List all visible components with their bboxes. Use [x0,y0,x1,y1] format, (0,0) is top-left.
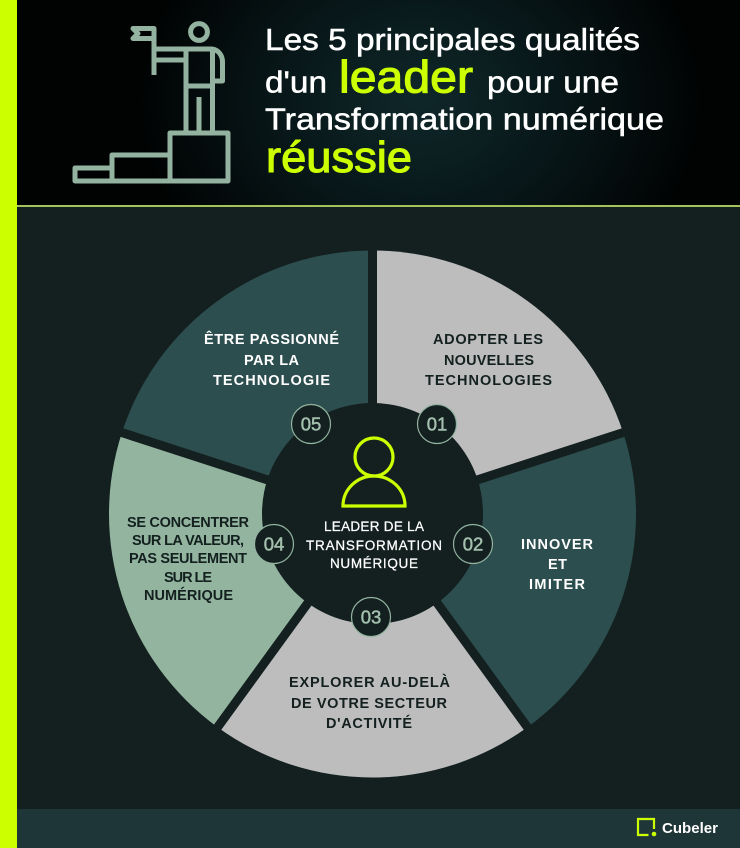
label 01 [425,332,552,389]
label 02: IMITER [529,577,586,593]
label 03: DE VOTRE SECTEUR [291,696,448,712]
badge 01 [418,404,456,444]
label 04: NUMÉRIQUE [144,587,233,604]
centre disc [262,403,483,624]
wheel of five qualities [109,245,636,778]
label 05 [204,330,339,389]
label 01: ADOPTER LES [433,332,543,348]
badge 02 [454,524,492,564]
badge 04 [254,524,294,564]
badge 04: 04 [264,534,284,554]
badge 02: 02 [463,534,483,554]
title: Les 5 principales qualités [265,22,640,57]
title: pour une [487,64,619,100]
label 04: PAS SEULEMENT [129,551,247,567]
segment 01 [372,250,623,514]
badge 05: 05 [301,414,321,434]
label 04: SUR LA VALEUR, [132,533,244,549]
label 03: D'ACTIVITÉ [326,715,412,732]
logo: Cubeler: Cubeler [662,820,718,837]
label 04: SE CONCENTRER [127,515,250,531]
title: réussie [266,133,412,182]
logo: Cubeler [638,819,718,837]
badge 03 [352,598,390,636]
header band [0,0,740,207]
title [265,22,664,182]
centre label: TRANSFORMATION [306,538,442,553]
segment 05 [122,250,373,514]
centre label [306,519,442,571]
label 05: ÊTRE PASSIONNÉ [204,330,339,348]
label 05: PAR LA [244,353,300,369]
centre label: LEADER DE LA [324,519,424,534]
segment gaps [117,245,628,732]
left accent strip [0,0,17,848]
label 01: TECHNOLOGIES [425,373,552,389]
label 05: TECHNOLOGIE [213,373,330,389]
title: d'un [265,64,327,100]
label 04 [127,515,250,604]
segment 03 [218,514,527,778]
label 02: INNOVER [521,537,594,553]
footer band [17,809,740,848]
label 02: ET [548,557,567,573]
label 01: NOUVELLES [444,353,534,369]
badge 01: 01 [427,414,447,434]
segment 04 [109,433,372,727]
segment 02 [372,433,636,727]
label 03: EXPLORER AU-DELÀ [289,674,451,691]
icon: leader on podium with flag [75,24,228,181]
icon: person [343,438,405,506]
label 04: SUR LE [164,570,212,586]
title: leader [339,52,473,102]
label 03 [289,674,451,732]
badge 05 [292,404,330,444]
centre label: NUMÉRIQUE [330,556,418,571]
badge 03: 03 [361,606,381,628]
label 02 [521,537,594,593]
title: Transformation numérique [265,102,664,136]
